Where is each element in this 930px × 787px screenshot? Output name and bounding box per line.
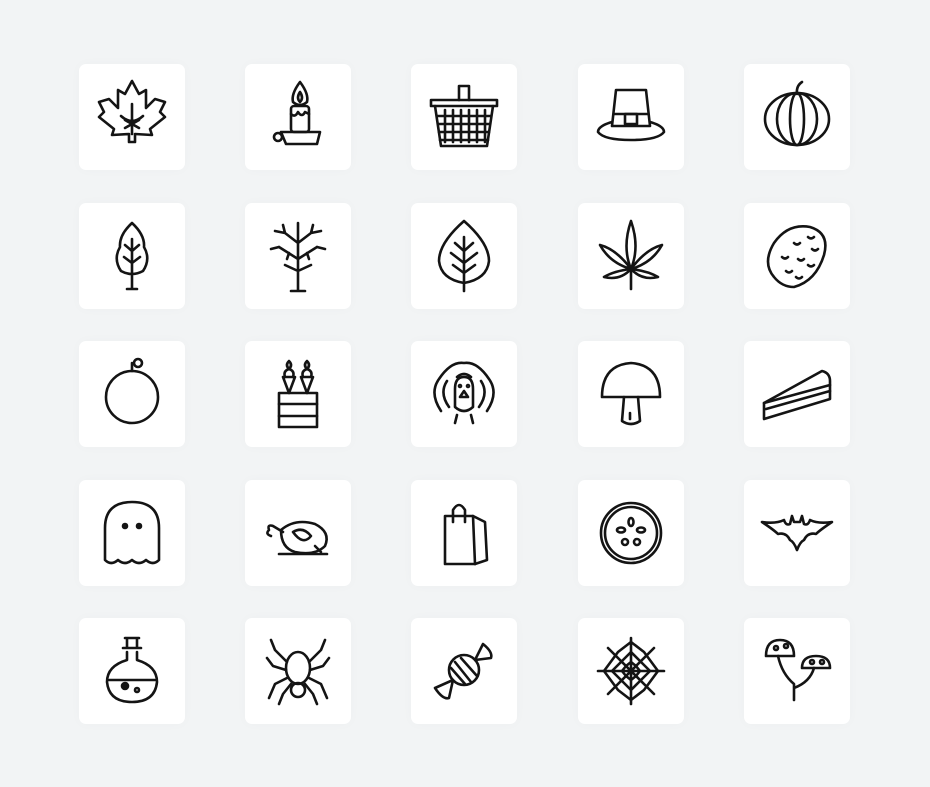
card: candle — [245, 64, 351, 170]
card: pie slice — [744, 341, 850, 447]
card: bare tree — [245, 203, 351, 309]
card: shopping bag — [411, 480, 517, 586]
card: spider — [245, 618, 351, 724]
card: turkey — [411, 341, 517, 447]
card: pilgrim hat — [578, 64, 684, 170]
card: roast chicken — [245, 480, 351, 586]
card: tree — [79, 203, 185, 309]
card: basket — [411, 64, 517, 170]
card: orange — [79, 341, 185, 447]
card: potato — [744, 203, 850, 309]
card: cucumber slice — [578, 480, 684, 586]
card: leaf — [411, 203, 517, 309]
card: mushroom — [578, 341, 684, 447]
card: bat — [744, 480, 850, 586]
card: carrot crate — [245, 341, 351, 447]
card: spider web — [578, 618, 684, 724]
card: ghost — [79, 480, 185, 586]
card: candy — [411, 618, 517, 724]
card: potion flask — [79, 618, 185, 724]
card: toadstools — [744, 618, 850, 724]
card: cannabis-like leaf — [578, 203, 684, 309]
card: pumpkin — [744, 64, 850, 170]
card: maple leaf — [79, 64, 185, 170]
